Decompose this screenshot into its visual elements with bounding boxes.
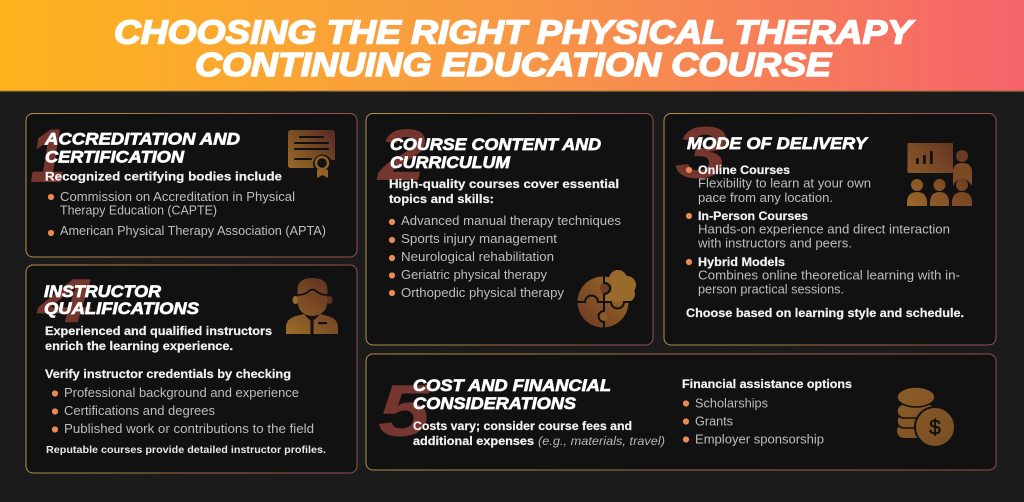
subheading: Verify instructor credentials by checking (45, 367, 291, 381)
heading: ACCREDITATION AND (44, 130, 240, 148)
panel: course content and curriculum (366, 114, 653, 345)
bullet list: Professional background and experience (64, 386, 299, 400)
closing note: Choose based on learning style and schedule. (686, 306, 964, 320)
delivery option: hybrid: Hybrid Models (698, 255, 785, 269)
bullet list: Grants (695, 414, 733, 428)
bullet list (389, 214, 621, 300)
delivery option: online: pace from any location. (698, 191, 833, 205)
number 5: 5 (378, 371, 432, 452)
number 2: 2 (376, 115, 426, 196)
header banner (0, 0, 1024, 92)
heading (44, 130, 240, 166)
note: Reputable courses provide detailed instructor profiles. (46, 444, 326, 456)
heading: COST AND FINANCIAL (413, 377, 611, 395)
bullet list: American Physical Therapy Association (APTA) (60, 224, 326, 238)
intro text: enrich the learning experience. (45, 339, 233, 353)
icon: coins (897, 387, 955, 447)
delivery option: in-person (686, 209, 950, 250)
description: (e.g., materials, travel) (538, 434, 665, 448)
subheading: Financial assistance options (682, 377, 852, 391)
heading (44, 283, 199, 318)
delivery option: in-person: In-Person Courses (698, 209, 808, 223)
icon: instructor (286, 278, 338, 334)
bullet list: Sports injury management (401, 232, 558, 246)
intro text: topics and skills: (389, 192, 494, 206)
heading: QUALIFICATIONS (44, 300, 199, 318)
heading (390, 136, 601, 172)
bullet list (48, 190, 326, 238)
bullet list: Commission on Accreditation in Physical (60, 190, 295, 204)
description (413, 419, 665, 448)
delivery option: hybrid (686, 255, 960, 296)
icon: certificate (288, 130, 335, 178)
panel: instructor qualifications (26, 265, 357, 473)
bullet list: Employer sponsorship (695, 432, 824, 446)
delivery option: in-person: Hands-on experience and direct interaction (698, 222, 950, 236)
number 1: 1 (31, 116, 65, 197)
icon: puzzle (577, 270, 636, 329)
intro text (45, 324, 272, 353)
bullet list (52, 386, 314, 436)
bullet list: Therapy Education (CAPTE) (60, 204, 217, 218)
heading (413, 377, 611, 413)
icon: coins: $ (929, 416, 941, 440)
delivery option: online (686, 163, 871, 205)
icon: presentation (907, 143, 972, 206)
heading: MODE OF DELIVERY (687, 135, 869, 153)
delivery option: in-person: with instructors and peers. (697, 236, 852, 250)
number 3: 3 (675, 113, 727, 194)
heading: COURSE CONTENT AND (390, 136, 601, 154)
delivery option: online: Flexibility to learn at your own (698, 176, 871, 190)
bullet list: Geriatric physical therapy (401, 268, 548, 282)
delivery option: hybrid: Combines online theoretical learning with in- (698, 268, 960, 282)
heading: CONSIDERATIONS (413, 395, 576, 413)
heading: INSTRUCTOR (44, 283, 161, 301)
title (114, 14, 915, 83)
bullet list: Orthopedic physical therapy (401, 286, 565, 300)
bullet list: Scholarships (695, 396, 768, 410)
panel: mode of delivery (664, 113, 996, 345)
panel: accreditation and certification (26, 114, 357, 257)
bullet list: Neurological rehabilitation (401, 250, 554, 264)
intro text (389, 177, 619, 206)
description: Costs vary; consider course fees and (413, 419, 632, 433)
delivery option: online: Online Courses (698, 163, 790, 177)
number 4: 4 (35, 267, 93, 336)
title: CONTINUING EDUCATION COURSE (195, 46, 832, 83)
intro text: Experienced and qualified instructors (45, 324, 272, 338)
bullet list (683, 396, 824, 446)
bullet list: Published work or contributions to the field (64, 422, 314, 436)
delivery option: hybrid: person practical sessions. (698, 282, 844, 296)
subheading: Recognized certifying bodies include (45, 170, 282, 184)
panel: cost and financial considerations (366, 354, 996, 470)
bullet list: Advanced manual therapy techniques (401, 214, 621, 228)
heading: CERTIFICATION (45, 148, 185, 166)
description: additional expenses (413, 434, 534, 448)
bullet list: Certifications and degrees (64, 404, 215, 418)
intro text: High-quality courses cover essential (389, 177, 619, 191)
title: CHOOSING THE RIGHT PHYSICAL THERAPY (114, 14, 915, 50)
heading: CURRICULUM (390, 154, 511, 172)
